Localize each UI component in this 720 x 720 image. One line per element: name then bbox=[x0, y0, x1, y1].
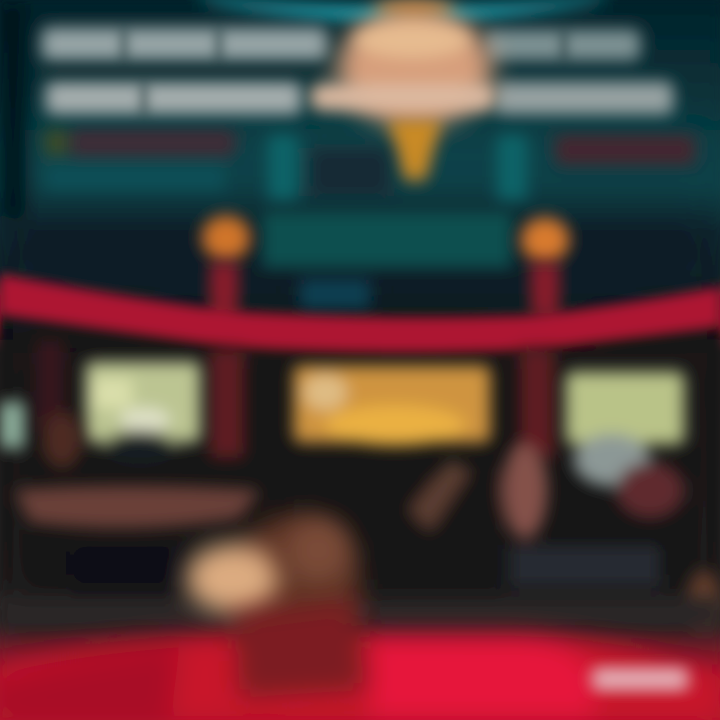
emblem highlights bbox=[310, 0, 495, 180]
red carpet bbox=[0, 634, 720, 720]
left lantern bbox=[202, 216, 250, 317]
title blurred rows bbox=[42, 28, 673, 114]
left screen bbox=[86, 362, 200, 466]
pale corner mark bbox=[592, 668, 688, 690]
right lantern bbox=[521, 218, 569, 317]
red beam bbox=[0, 275, 720, 352]
grey floor edge bbox=[0, 598, 720, 628]
red posts below beam bbox=[35, 340, 554, 458]
far-left small screen bbox=[0, 402, 24, 448]
central teal panel bbox=[262, 212, 512, 308]
upper teal wall bbox=[0, 130, 720, 610]
top cyan arc bbox=[0, 0, 610, 220]
right screen bbox=[566, 372, 684, 518]
title dark gaps bbox=[40, 30, 568, 114]
centre screen bbox=[294, 366, 490, 445]
teal band details bbox=[45, 130, 695, 200]
central golden emblem bbox=[337, 10, 493, 126]
foreground figure bbox=[186, 515, 365, 698]
audience figures bbox=[15, 412, 720, 630]
